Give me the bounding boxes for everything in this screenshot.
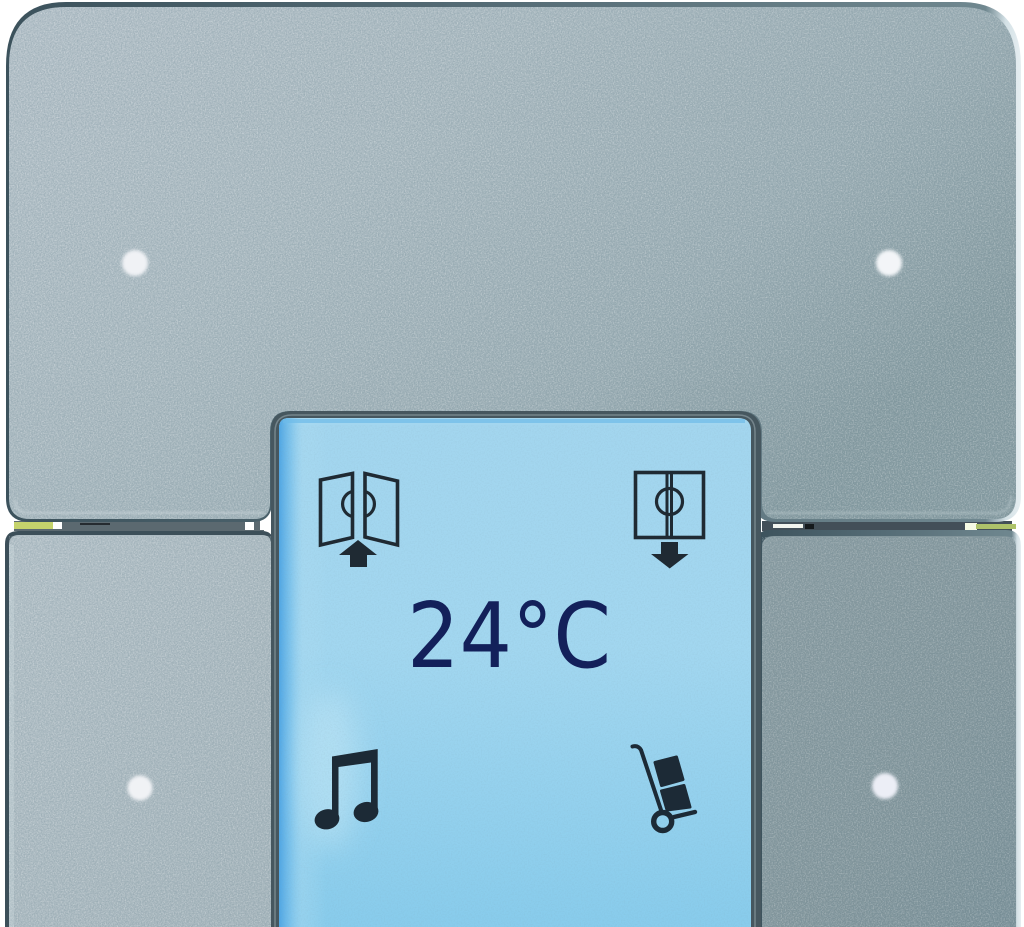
gap strip between panels — [14, 521, 1016, 531]
indicator light: top right — [876, 250, 902, 276]
icon: doors opening with up arrow — [320, 474, 398, 567]
indicator light: bottom left — [128, 776, 152, 800]
panel: bottom left button — [5, 531, 273, 927]
panel: top button — [0, 0, 1024, 527]
icon: music note — [313, 749, 380, 832]
display frame — [271, 411, 761, 927]
indicator light: bottom right — [872, 773, 898, 799]
indicator light: top left — [122, 250, 148, 276]
panel: blue display — [279, 418, 751, 927]
icon: doors closed with down arrow — [636, 472, 704, 568]
temperature reading: 24°C — [407, 584, 611, 689]
icon: hand truck with boxes — [632, 746, 695, 830]
panel: bottom right button — [756, 530, 1021, 927]
